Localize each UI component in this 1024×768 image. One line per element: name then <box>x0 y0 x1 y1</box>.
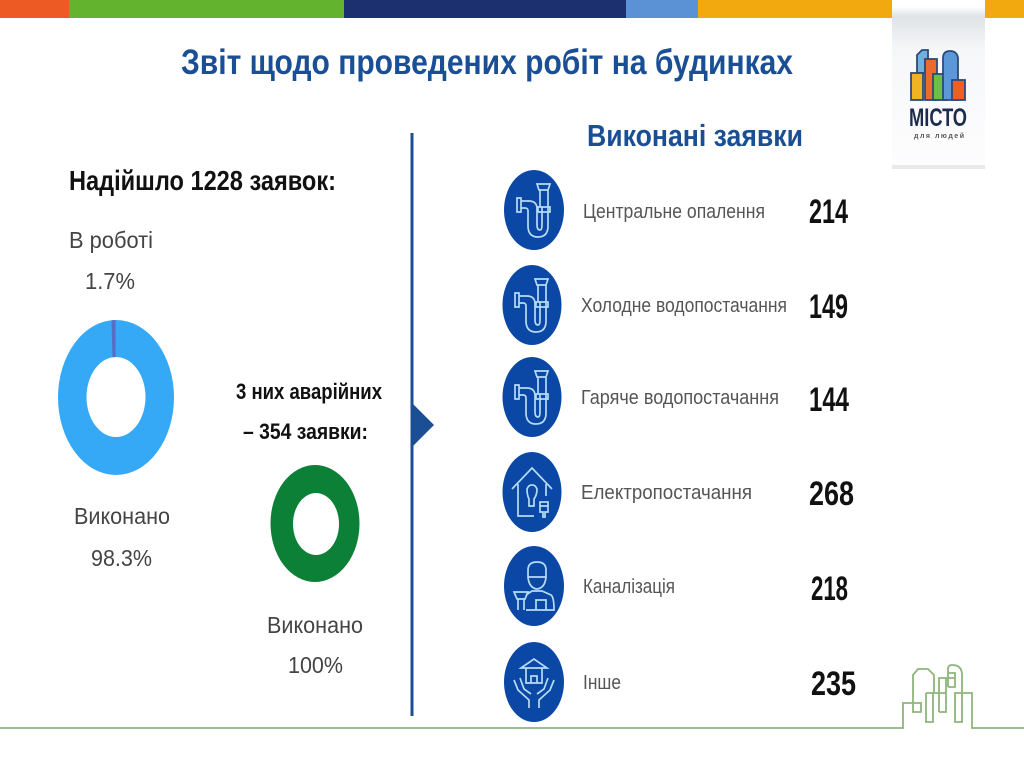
value: completed emergency 100%: 100% <box>288 652 343 678</box>
value: 214 <box>809 193 848 231</box>
value: 268 <box>809 475 854 513</box>
divider arrow <box>410 133 434 716</box>
label: Каналізація <box>583 576 675 598</box>
logo tagline: для людей <box>914 132 964 140</box>
label: completed: Виконано <box>74 503 170 529</box>
donut chart: all requests <box>58 320 174 475</box>
top colour bar <box>0 0 1024 18</box>
value: 149 <box>809 288 848 326</box>
heading: completed requests: Виконані заявки <box>587 118 803 153</box>
icon: house with bulb and plug <box>502 452 562 532</box>
value: 218 <box>811 570 848 608</box>
logo: Місто для людей <box>892 0 985 169</box>
icon: pipe <box>504 170 564 250</box>
footer skyline line <box>0 665 1024 728</box>
value: 144 <box>809 381 849 419</box>
text: emergency requests <box>236 379 383 444</box>
value: completed 98.3%: 98.3% <box>91 545 152 571</box>
label: Гаряче водопостачання <box>581 387 779 409</box>
label: Інше <box>583 672 621 694</box>
label: Центральне опалення <box>583 201 765 223</box>
label: Холодне водопостачання <box>581 295 787 317</box>
row: electricity <box>502 452 854 532</box>
icon: hands holding house <box>504 642 564 722</box>
value: 235 <box>811 665 856 703</box>
logo wordmark: МІСТО <box>909 104 967 132</box>
text: emergency requests: 3 них аварійних <box>236 379 383 404</box>
row: hot water <box>502 357 849 437</box>
icon: pipe <box>502 265 562 345</box>
row: other <box>504 642 856 722</box>
label: in progress: В роботі <box>69 227 153 253</box>
label: completed emergency: Виконано <box>267 612 363 638</box>
label: Електропостачання <box>581 482 752 504</box>
donut chart: emergency requests <box>270 465 360 582</box>
icon: plumber <box>504 546 564 626</box>
icon: pipe <box>502 357 562 437</box>
title: Звіт щодо проведених робіт на будинках <box>181 43 793 82</box>
text: emergency requests: – 354 заявки: <box>243 419 368 444</box>
row: cold water <box>502 265 848 345</box>
row: sewerage <box>504 546 848 626</box>
heading: received requests: Надійшло 1228 заявок: <box>69 165 336 196</box>
logo buildings <box>911 50 965 100</box>
row: central heating <box>504 170 848 250</box>
value: in progress 1.7%: 1.7% <box>85 268 135 294</box>
